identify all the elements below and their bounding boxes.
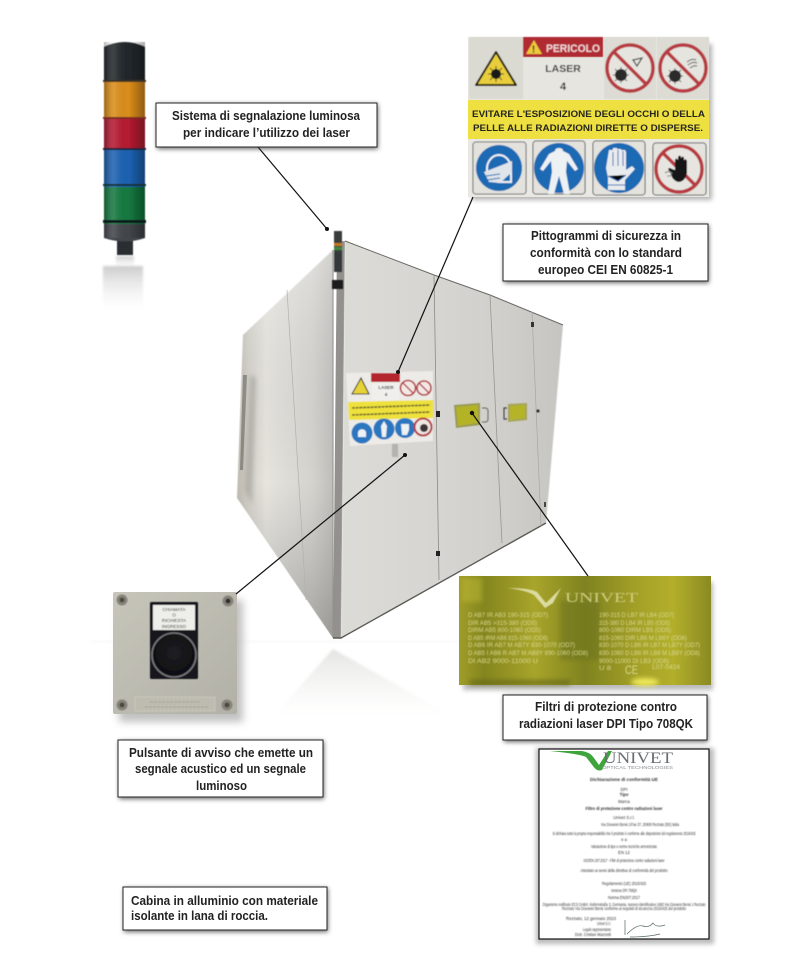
filter markings xyxy=(468,613,700,677)
emergency push button box xyxy=(113,592,243,722)
green univet logo: UNIVET xyxy=(603,750,674,767)
filter markings: U 8 xyxy=(599,666,612,672)
document text: Tipo xyxy=(620,792,629,797)
cabin safety sign: 4 xyxy=(385,392,388,397)
emergency push button box: CHIAMATA xyxy=(162,607,186,612)
callout: button: segnale acustico ed un segnale xyxy=(135,762,306,776)
light signalling tower xyxy=(103,42,146,255)
document text: Univet S.r.l. xyxy=(613,815,635,820)
yellow warning band: PELLE ALLE RADIAZIONI DIRETTE O DISPERSE. xyxy=(473,123,703,134)
prohibition sign eyes xyxy=(607,45,653,91)
filter markings: DI AB2 9000-11000 U xyxy=(468,659,538,665)
cabin left face xyxy=(237,250,333,638)
cabin corner post xyxy=(333,241,345,638)
callout: button: Pulsante di avviso che emette un xyxy=(129,746,313,760)
document text: Legale rappresentante xyxy=(583,927,611,932)
filter label photo xyxy=(459,576,713,690)
cabin button box xyxy=(392,444,398,457)
document text: Dichiarazione di conformità UE xyxy=(590,777,658,782)
callout: filters: radiazioni laser DPI Tipo 708QK xyxy=(519,717,693,731)
univet logo: UNIVET xyxy=(565,591,639,606)
callout: pictograms: Pittogrammi di sicurezza in xyxy=(531,229,681,243)
aluminium cabin xyxy=(237,241,563,638)
callout: cabin material: isolante in lana di roccia. xyxy=(131,909,268,923)
univet logo xyxy=(507,588,639,608)
leader line: button xyxy=(236,453,407,594)
filter markings: DIR AB5 >315-380 (OD5) xyxy=(468,621,537,627)
cabin filter windows xyxy=(454,403,540,428)
document text: Si dichiara sotto la propria responsabilità che il prodotto è conforme alle disposizioni del regolamento 2016/425 xyxy=(552,831,696,836)
pericolo header xyxy=(523,37,603,57)
filter markings: 9000-11000 DI LB3 (OD6) xyxy=(599,659,669,665)
filter markings: D AB5 IRM AB6 815-1060 (OD6) xyxy=(468,636,548,642)
callout: pictograms xyxy=(503,224,709,283)
filter markings: CE xyxy=(625,663,638,677)
declaration of conformity document xyxy=(536,748,714,944)
cabin safety sign: LASER xyxy=(378,385,394,390)
callout: pictograms: conformità con lo standard xyxy=(530,246,682,260)
leader line: filter xyxy=(470,411,588,576)
document text: Rezzato Via Giovanni Bensi conforme ai requisiti di sicurezza 2016/425 del prodotto xyxy=(562,906,687,911)
light tower reflection xyxy=(103,256,143,316)
yellow warning band: EVITARE L'ESPOSIZIONE DEGLI OCCHI O DELLA xyxy=(472,109,705,120)
document text: Norma EN207:2017 xyxy=(608,895,641,900)
filter markings: D AB6 IR AB7 M AB7Y 830-1070 (OD7) xyxy=(468,643,575,649)
document text: Rezzato, 12 gennaio 2023 xyxy=(566,916,617,921)
signature xyxy=(625,920,665,937)
safety pictograms panel xyxy=(468,37,712,200)
prohibition sign skin xyxy=(660,45,706,91)
callout: light tower: Sistema di segnalazione luminosa xyxy=(172,109,361,123)
document text: Filtro di protezione contro radiazioni laser xyxy=(586,806,663,811)
callout: button: luminoso xyxy=(196,779,247,793)
leader line: pictograms xyxy=(396,197,473,374)
filter markings: 800-1060 DIRM LB5 (OD5) xyxy=(599,628,671,634)
filter markings: D AB5 I AB6 R AB7 M AB8Y 890-1060 (OD8) xyxy=(468,651,588,657)
document text: Organismo notificato ECS GmbH, Kiefernstraße 3, Germania, numero identificativo 1883 Via Giovanni Bensi 1 Rezzato xyxy=(542,902,706,907)
gloves pictogram xyxy=(593,141,645,195)
emergency push button box: INGRESSO xyxy=(162,624,187,629)
document text: Univet S.r.l. xyxy=(597,921,611,926)
cabin floor reflection xyxy=(90,641,470,726)
callout: light tower xyxy=(156,103,378,149)
filter markings: 830-1060 D LB6 IR LB8 M LB8Y (OD8) xyxy=(599,651,700,657)
overalls pictogram xyxy=(533,141,585,194)
filter markings: D AB7 IR AB3 190-315 (OD7) xyxy=(468,613,548,619)
filter markings: 830-1070 D LB6 IR LB7 M LB7Y (OD7) xyxy=(599,643,700,649)
filter markings: DIRM AB5 800-1060 (OD5) xyxy=(468,628,541,634)
laser class: LASER xyxy=(545,63,581,75)
document text: Regolamento (UE) 2016/425 xyxy=(602,881,647,886)
filter markings: L07-0424 xyxy=(652,665,681,671)
callout: pictograms: europeo CEI EN 60825-1 xyxy=(538,263,673,277)
emergency push button box: RICHIESTA xyxy=(162,618,187,623)
yellow warning band xyxy=(468,100,709,139)
cabin light tower xyxy=(332,231,343,289)
laser class xyxy=(523,58,603,99)
pericolo header: PERICOLO xyxy=(546,43,600,55)
document text: ISO/EN 207:2017 - Filtri di protezione contro radiazioni laser xyxy=(584,858,665,863)
document text: Attestato ai sensi della direttiva di conformità del prodotto xyxy=(580,868,668,873)
cabin safety sign xyxy=(346,371,433,446)
emergency push button box: O xyxy=(172,612,176,618)
filter markings: 190-315 D LB7 IR LB4 (OD7) xyxy=(599,613,674,619)
document text: Versione DPI 708QK xyxy=(611,888,637,893)
mask pictogram xyxy=(473,142,526,194)
green univet logo: OPTICAL TECHNOLOGIES xyxy=(602,765,673,770)
no touching pictogram xyxy=(653,143,706,195)
laser class: 4 xyxy=(560,81,567,93)
cabin front face xyxy=(341,241,563,638)
filter markings: 815-1060 DIR LB6 M LB6Y (OD6) xyxy=(599,636,687,642)
leader line: light tower xyxy=(258,147,329,231)
callout: filters: Filtri di protezione contro xyxy=(535,700,677,714)
document text: Via Giovanni Bensi 1/Fax 37, 20900 Rezzato (BS) Italia xyxy=(601,822,680,827)
callout: button xyxy=(118,740,324,799)
callout: light tower: per indicare l’utilizzo dei laser xyxy=(183,126,350,140)
document text: EN 12 xyxy=(618,850,630,855)
filter markings: 315-380 D LB4 IR LB5 (OD5) xyxy=(599,621,670,627)
document text: DPI xyxy=(621,787,627,792)
document text: e a xyxy=(621,837,628,842)
callout: filters xyxy=(503,695,708,742)
document text: Valutazione di tipo e norme tecniche armonizzate xyxy=(591,844,657,849)
pericolo header: ! xyxy=(532,44,535,56)
laser warning triangle xyxy=(476,52,516,85)
green univet logo xyxy=(550,750,674,770)
callout: cabin material: Cabina in alluminio con materiale xyxy=(131,894,318,908)
callout: cabin material xyxy=(123,887,328,932)
document text: Dott. Cristian Mazzetti xyxy=(575,932,611,937)
document text xyxy=(542,777,706,937)
document text: Marca xyxy=(618,799,630,804)
